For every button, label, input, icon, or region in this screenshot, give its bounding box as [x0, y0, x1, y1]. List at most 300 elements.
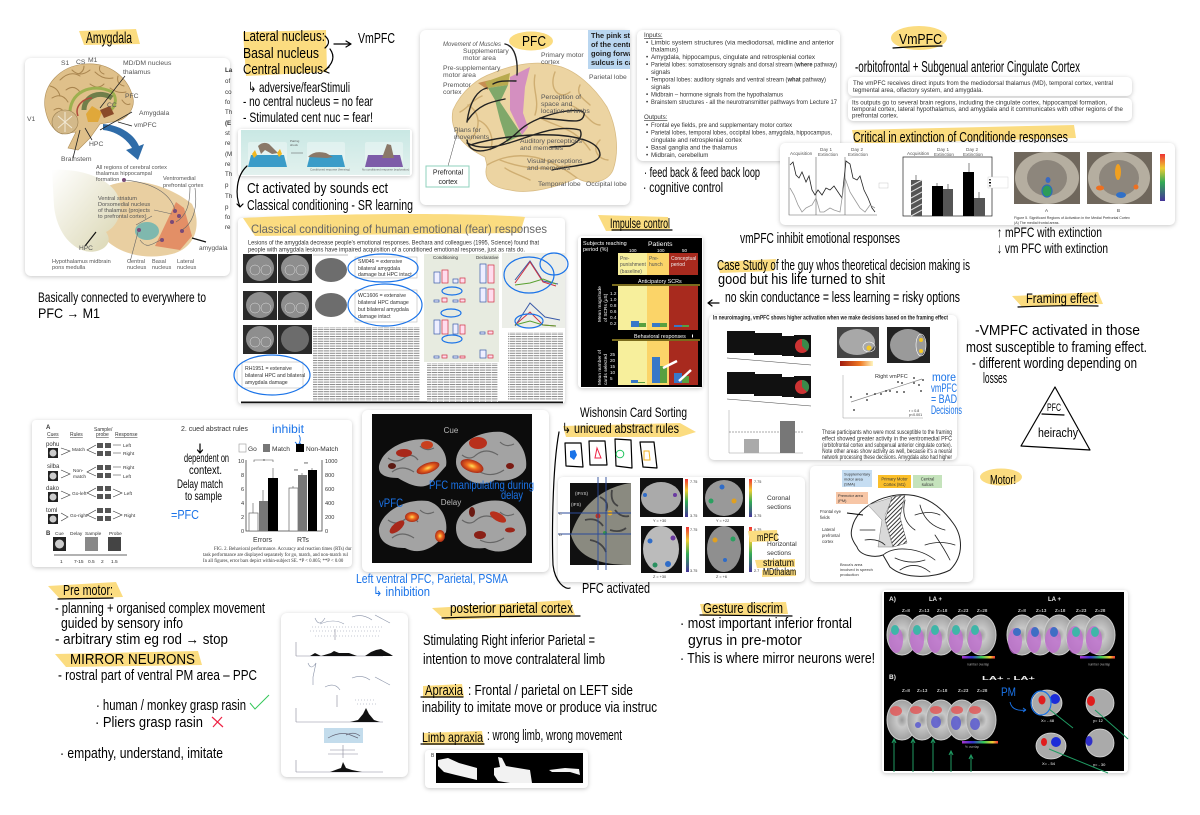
period header: Conceptual — [671, 256, 696, 262]
panel: inputs and outputs: signals — [651, 84, 670, 91]
card bars — [597, 341, 698, 385]
icon: cards — [565, 439, 657, 468]
panel: vmPFC inputs: tegmental area, olfactory system, and amygdala. — [853, 87, 983, 94]
note: premotor: - arbitrary stim eg rod → stop — [55, 631, 228, 648]
note: extinction directions: ↑ mPFC with extinction — [997, 224, 1102, 240]
blue note: inhibit: inhibit — [272, 422, 305, 436]
bar chart: Day 1 — [937, 147, 949, 152]
task schematic: pohu — [46, 442, 59, 448]
panel: inputs and outputs: • — [646, 76, 648, 84]
brain region labels: cortex — [541, 59, 560, 66]
panel: cue and delay brains: Cue — [444, 426, 459, 435]
panel: inputs and outputs: Frontal eye fields, pre and supplementary motor cortex — [651, 122, 793, 129]
section B labels — [889, 674, 1036, 693]
amygdala diagram labels: amygdala — [199, 245, 228, 252]
sagittal brain: (IFS) — [571, 502, 581, 507]
blue note box — [588, 30, 646, 69]
heading: PFC: PFC — [522, 33, 546, 50]
period header: Pre- — [620, 256, 630, 262]
WC1606 callout — [348, 284, 422, 326]
bar chart: errors and RTs: 1000 — [325, 459, 337, 465]
amygdala diagram labels: Dorsomedial nucleus — [98, 202, 150, 208]
icon: upper brain sagittal — [45, 64, 133, 150]
recording b — [308, 663, 390, 704]
brain region labels: motor area — [463, 55, 496, 62]
panel: inputs and outputs: • — [646, 152, 648, 159]
note: gesture discrimination: · most important inferior frontal — [680, 615, 852, 632]
text block: clipped letters: fo — [225, 214, 231, 221]
note: premotor: · human / monkey grasp rasin — [96, 697, 246, 714]
intro text: Lesions of the amygdala decrease people's emotional responses. Bechara and colleagues (1995, Science) found that — [248, 240, 539, 246]
task schematic: Response — [115, 432, 138, 438]
brain region labels: Pre-supplementary — [443, 65, 501, 72]
MRI A and B: A — [1045, 208, 1048, 213]
section A labels: Z=28 — [1095, 608, 1106, 613]
scatter plot — [843, 374, 924, 418]
note: limb apraxia — [421, 727, 623, 745]
SCR bars: 1.0 — [610, 297, 617, 302]
panel: amygdala anatomy — [25, 57, 230, 276]
bar chart: errors and RTs: 10 — [238, 459, 244, 465]
arrows: movement pathways — [467, 44, 600, 170]
note: feedback: · feed back & feed back loop — [644, 164, 760, 180]
heading: extinction — [852, 125, 1076, 146]
note: premotor: · Pliers grasp rasin — [95, 714, 203, 731]
text block: clipped letters: of — [225, 78, 230, 85]
text block: clipped letters: Th — [225, 193, 233, 200]
note: amygdala nuclei: VmPFC — [358, 30, 395, 47]
region boxes — [836, 470, 942, 504]
section B labels: Z=28 — [977, 688, 988, 693]
text block: clipped letters — [225, 67, 233, 231]
figure caption — [203, 547, 352, 564]
note: connected everywhere: Basically connected to everywhere to — [38, 289, 206, 305]
blue note: more vmPFC: Decisions — [931, 403, 962, 417]
bar chart: errors and RTs: Match — [272, 446, 290, 453]
note: classical conditioning: Ct activated by sounds ect — [247, 180, 389, 197]
bar chart: conditioning: Conditioning — [433, 255, 459, 260]
heading: impulse control — [598, 215, 672, 231]
task schematic: Match — [72, 447, 85, 453]
SCR bars: 0.2 — [610, 321, 617, 326]
note: Wisconsin card sorting: Wishonsin Card Sorting — [580, 404, 687, 420]
task schematic: Right — [123, 465, 135, 471]
panel: vmPFC inputs: The vmPFC receives direct inputs from the mediodorsal thalamus (MD), temporal cortex, ventral — [853, 80, 1113, 87]
panel: inputs and outputs: signals — [651, 69, 670, 76]
task schematic: Non- — [73, 468, 84, 474]
bar chart: conditioning — [424, 254, 499, 362]
blue labels: PFC manipulating during — [429, 478, 534, 492]
note: case study — [708, 257, 970, 306]
brain labels — [27, 57, 172, 163]
task schematic: B — [46, 531, 51, 537]
highlighted notes: mPFC — [757, 532, 779, 544]
MRI A and B: Figure 5. Significant Regions of Activation in the Medial Prefrontal Cortex — [1014, 216, 1130, 220]
title: Classical conditioning of human emotional (fear) responses — [251, 222, 547, 236]
blue note box: sulcus is called — [591, 58, 646, 67]
activation brains — [379, 432, 526, 552]
section B labels: LA+ - LA+ — [982, 676, 1036, 682]
brain labels: Brainstem — [61, 156, 92, 163]
brain region labels: motor area — [443, 72, 476, 79]
note: amygdala nuclei: ↳ adversive/fearStimuli — [248, 79, 350, 95]
note: amygdala nuclei: - Stimulated cent nuc = fear! — [243, 109, 373, 125]
region boxes: Primary Motor — [881, 476, 908, 482]
period header: Pre- — [649, 256, 659, 262]
bar chart: Acquisition — [907, 151, 930, 156]
amygdala diagram labels: Hypothalamus midbrain — [52, 259, 111, 265]
card bars: 20 — [610, 358, 616, 363]
section B brains — [887, 700, 998, 749]
SCR bars: Mean magnitude — [597, 286, 603, 322]
note: apraxia: : Frontal / parietal on LEFT side — [468, 682, 633, 699]
note: extinction directions — [997, 224, 1108, 256]
brain region labels: Occipital lobe — [586, 181, 627, 188]
period header: (baseline) — [620, 269, 642, 275]
note: gesture discrimination: · This is where mirror neurons were! — [680, 650, 875, 667]
text block: clipped letters: co — [225, 89, 232, 96]
section A labels: Z=23 — [958, 608, 969, 613]
bar chart: errors and RTs: 0 — [241, 529, 244, 535]
line chart — [789, 147, 888, 215]
text block: clipped letters: fo — [225, 99, 231, 106]
note: connected everywhere — [38, 289, 206, 321]
card bars: 25 — [610, 352, 616, 357]
activation scans — [837, 327, 930, 366]
sagittal brain: C — [559, 511, 562, 516]
task schematic: 0.5 — [88, 559, 95, 565]
coronal and horizontal scans: 7.75 — [754, 480, 761, 484]
note: apraxia: Apraxia — [425, 682, 463, 699]
bar chart: errors and RTs: 0 — [325, 529, 328, 535]
bar chart: errors and RTs: Non-Match — [306, 446, 339, 453]
coronal and horizontal scans: 2.7 — [754, 569, 759, 573]
panel: rat conditioning: Conditioned response (freezing) — [310, 168, 350, 172]
note: framing effect: most susceptible to framing effect. — [966, 339, 1147, 356]
skull sections — [1032, 689, 1114, 767]
icon: green check — [250, 695, 269, 709]
amygdala diagram labels: All regions of cerebral cortex — [96, 165, 167, 171]
note: apraxia — [421, 682, 657, 716]
bar chart: errors and RTs: ** — [294, 469, 298, 475]
heading: PFC — [509, 32, 553, 50]
task schematic: A — [46, 425, 51, 431]
section labels: sections — [767, 504, 792, 511]
blue note: left ventral PFC: Left ventral PFC, Parietal, PSMA — [356, 571, 508, 586]
panel: inputs and outputs: • — [646, 54, 648, 61]
section B labels: B) — [889, 674, 896, 681]
coronal and horizontal scans: Z = +6 — [716, 575, 727, 579]
amygdala diagram labels: Ventral striatum — [98, 196, 137, 202]
note: extinction directions: ↓ vm PFC with extinction — [997, 240, 1108, 256]
line chart: Extinction — [818, 152, 838, 157]
task schematic: probe — [96, 432, 109, 438]
side labels: prefrontal — [822, 533, 840, 538]
panel: framing effect imaging — [709, 315, 962, 461]
section A labels: LA + — [1048, 597, 1061, 603]
SCR bars: 0.8 — [610, 303, 617, 308]
blue note: =PFC: =PFC — [171, 507, 199, 522]
section A labels: Z=8 — [902, 608, 910, 613]
amygdala diagram labels: to prefrontal cortex) — [98, 214, 147, 220]
brain region labels: Perception of — [541, 94, 581, 101]
task screens — [727, 331, 811, 406]
bar chart: errors and RTs: 600 — [325, 487, 334, 493]
panel: inputs and outputs: Limbic system structures (via mediodorsal, midline and anterior — [651, 40, 834, 46]
panel: inputs and outputs: thalamus) — [651, 46, 678, 54]
brain labels: V1 — [27, 116, 36, 123]
panel: cued abstract rules — [32, 420, 352, 567]
section A labels — [889, 596, 1106, 613]
line chart: Extinction — [848, 152, 868, 157]
WC1606 callout: damage intact — [358, 314, 391, 320]
section labels: sections — [767, 550, 792, 557]
section B labels: Z=23 — [958, 688, 969, 693]
task schematic: Cues — [47, 432, 59, 438]
side labels: cortex — [822, 539, 834, 544]
bar chart: Day 2 — [966, 147, 978, 152]
bar chart: errors and RTs: 400 — [325, 501, 334, 507]
diagram: PFC hierarchy triangle — [1021, 387, 1090, 450]
bar chart: errors and RTs: Go — [248, 446, 257, 453]
note: amygdala nuclei: Basal nucleus — [243, 45, 319, 62]
panel: rat conditioning: shock — [290, 143, 298, 147]
task schematic: Go-left — [72, 491, 87, 497]
panel: inputs and outputs — [637, 30, 840, 161]
period header: hunch — [649, 262, 663, 268]
brain labels: PFC — [125, 93, 139, 100]
blue note: more vmPFC: = BAD — [931, 392, 957, 406]
task schematic: Right — [123, 451, 135, 457]
note: limb apraxia: Limb apraxia — [422, 729, 483, 745]
section A labels: Z=28 — [977, 608, 988, 613]
task schematic: Delay — [70, 531, 83, 537]
note: dependent on context: Delay match — [177, 477, 223, 491]
RH1951 callout: amygdala damage — [245, 380, 288, 386]
prefrontal cortex box: Prefrontal — [433, 170, 464, 176]
diagram: PFC hierarchy triangle: heirachy — [1038, 425, 1078, 440]
panel: inputs and outputs: Midbrain – hormone signals from the hypothalamus — [651, 92, 783, 98]
note: premotor: · empathy, understand, imitate — [60, 745, 223, 762]
brain region labels: Visual perceptions — [527, 158, 583, 165]
note: vmPFC inhibits: vmPFC inhibit emotional responses — [740, 230, 900, 247]
task schematic: Sample — [85, 531, 102, 537]
blue labels: delay — [501, 488, 523, 502]
brain region labels: Supplementary — [463, 48, 509, 55]
SCR bars: 0.6 — [610, 309, 617, 314]
brain region labels: and memories — [520, 145, 564, 152]
SCR bars: 1.2 — [610, 291, 617, 296]
section A labels: A) — [889, 596, 896, 603]
MRI A and B: B — [1117, 208, 1120, 213]
blue note box: going forward — [591, 49, 641, 58]
panel: vmPFC outputs: Its outputs go to several brain regions, including the cingulate cortex, hippocampal formation, — [852, 100, 1107, 106]
blue PM annotation — [1001, 685, 1051, 715]
brain region labels: Movement of Muscles — [443, 41, 502, 48]
card bars: 10 — [610, 370, 616, 375]
prefrontal cortex box: cortex — [438, 179, 458, 186]
skull sections: y= - 30 — [1093, 762, 1106, 767]
bar chart: Extinction — [963, 152, 983, 157]
brain scans — [243, 254, 348, 354]
line chart: Acquisition — [790, 151, 813, 156]
period header — [618, 253, 698, 275]
panel: inputs and outputs: • — [646, 144, 648, 152]
amygdala diagram labels: thalamus hippocampal — [96, 171, 152, 177]
bar chart: errors and RTs: ** — [304, 462, 308, 468]
bar chart: conditioning: Declarative — [476, 255, 499, 260]
note: dependent on context — [177, 444, 229, 503]
scatter plot: p<0.001 — [909, 413, 922, 417]
scatter plot: r = 0.8 — [909, 409, 919, 413]
section A brains: number overlap — [1088, 662, 1110, 666]
blue PM annotation: PM — [1001, 685, 1016, 699]
note: amygdala nuclei: - no central nucleus = no fear — [243, 93, 373, 109]
coronal and horizontal scans: Y = +30 — [653, 519, 666, 523]
amygdala diagram labels: nucleus — [152, 265, 171, 271]
bar chart: errors and RTs: * — [263, 459, 265, 465]
MRI A and B: (A) The medial frontal areas. — [1014, 221, 1059, 225]
blue note: inhibit — [272, 422, 305, 445]
region boxes: Central — [921, 476, 934, 482]
task schematic: Rules — [70, 432, 83, 438]
region boxes: motor area — [844, 476, 864, 482]
task schematic: match — [73, 474, 86, 480]
side labels: Broca's area — [840, 562, 863, 567]
text block: clipped letters: La — [225, 67, 233, 74]
task schematic — [46, 425, 138, 565]
panel: inputs and outputs: Outputs: — [644, 114, 668, 121]
heading: Amygdala: Amygdala — [86, 30, 132, 47]
region boxes: (PM) — [838, 498, 847, 503]
RH1951 callout: RH1951 = extensive — [245, 366, 292, 372]
period header: period — [671, 262, 685, 268]
brain region labels — [443, 41, 627, 188]
heading: vmPFC: VmPFC — [899, 31, 942, 48]
panel: inputs and outputs: • — [646, 99, 648, 106]
section A labels: Z=13 — [919, 608, 930, 613]
panel: vmPFC inputs — [848, 77, 1132, 96]
panel: patients chart: 100 — [629, 248, 637, 253]
panel: inputs and outputs: Parietal lobes, temporal lobes, occipital lobes, amygdala, hippocampus, — [651, 130, 832, 136]
panel: vmPFC outputs: prefrontal cortex. — [852, 112, 899, 120]
section labels — [767, 495, 797, 557]
panel: inputs and outputs: • — [646, 62, 648, 68]
panel: patients chart: period (%) — [583, 247, 609, 253]
note: framing effect: -VMPFC activated in those — [975, 322, 1140, 339]
note: premotor: MIRROR NEURONS — [70, 651, 195, 668]
bar chart: errors and RTs — [238, 444, 339, 544]
panel: framing effect imaging: In neuroimaging, vmPFC shows higher activation when we make decisions based on the framing effect — [713, 316, 948, 322]
amygdala diagram labels: nucleus — [127, 265, 146, 271]
recording a — [310, 615, 390, 636]
note: premotor: - rostral part of ventral PM area – PPC — [58, 667, 257, 684]
framing paragraph: Note other areas show activity as well, because it's a neural — [822, 448, 952, 455]
note: amygdala nuclei: Lateral nucleus: — [243, 28, 325, 45]
note: posterior parietal: intention to move contralateral limb — [423, 651, 605, 668]
framing paragraph — [822, 429, 952, 461]
amygdala diagram labels: prefrontal cortex — [163, 183, 204, 189]
brain region labels: space and — [541, 101, 573, 108]
bar chart — [903, 147, 1008, 216]
note: feedback: · cognitive control — [643, 179, 723, 195]
RH1951 callout: bilateral HPC and bilateral — [245, 373, 305, 379]
brain region labels: movements — [454, 134, 490, 141]
brain region labels: Temporal lobe — [538, 181, 581, 188]
bar chart: errors and RTs: 800 — [325, 473, 334, 479]
note: connected everywhere: PFC → M1 — [38, 305, 100, 321]
task schematic: Right — [124, 513, 136, 519]
text block: clipped letters: st — [225, 130, 230, 137]
panel: patients chart: Behavioral responses — [634, 334, 686, 340]
note: dependent on context: context. — [189, 463, 222, 477]
figure caption: In all figures, error bars depict within-subject SE. *P < 0.005; **P < 0.00 — [203, 559, 344, 564]
panel: mirror neuron recordings — [281, 613, 408, 777]
coronal and horizontal scans: 3.75 — [690, 514, 697, 518]
task schematic: 7-15 — [74, 559, 84, 565]
panel: patients chart: Anticipatory SCRs — [638, 279, 682, 285]
heading: impulse control: Impulse control — [610, 215, 670, 231]
panel: patients chart: 100 — [657, 248, 665, 253]
note: classical conditioning: Classical conditioning - SR learning — [247, 197, 413, 214]
region boxes: Cortex (M1) — [883, 482, 906, 487]
side labels: Frontal eye — [820, 509, 842, 514]
section A labels: Z=8 — [1018, 608, 1026, 613]
intro text — [248, 240, 539, 254]
brain labels: thalamus — [123, 69, 151, 76]
section A brains — [887, 615, 1115, 666]
panel: PFC brain — [420, 30, 646, 205]
figure caption: FIG. 2. Behavioral performance. Accuracy and reaction times (RTs) dur — [214, 547, 352, 552]
task schematic: Sample/ — [94, 427, 113, 433]
brain labels: CC — [107, 102, 117, 109]
hand silhouettes — [438, 758, 477, 780]
note: dependent on context: to sample — [185, 489, 222, 503]
line chart: Day 2 — [851, 147, 863, 152]
brain region labels: Auditory perceptions — [520, 138, 583, 145]
note: case study: Case Study of the guy whos theoretical decision making is — [717, 257, 970, 274]
task schematic: Go-right — [70, 513, 88, 519]
task schematic: Cue — [55, 531, 64, 537]
note: gesture discrimination: Gesture discrim — [703, 600, 783, 617]
sagittal brain: D — [559, 532, 562, 537]
recording c — [324, 728, 363, 743]
panel: inputs and outputs: Midbrain, cerebellum — [651, 152, 708, 159]
blue note: left ventral PFC: ↳ inhibition — [373, 584, 430, 599]
bar chart: frame manipulation — [729, 410, 803, 453]
framing paragraph: network processing these decisions. Amygdala also had higher — [822, 454, 952, 461]
task schematic: silba — [47, 464, 60, 470]
pointer lines — [73, 76, 132, 158]
note: posterior parietal: posterior parietal cortex — [450, 600, 573, 617]
region boxes: Supplementary — [844, 472, 870, 476]
skull sections: y= 12 — [1093, 718, 1104, 723]
panel: patients chart — [578, 236, 703, 388]
note: posterior parietal — [423, 600, 605, 668]
task schematic: Left — [123, 474, 132, 480]
WC1606 callout: but bilateral amygdala — [358, 307, 409, 313]
skull sections: X= - 54 — [1042, 761, 1056, 766]
text block: clipped letters: (E — [225, 120, 231, 127]
text block: clipped letters: p — [225, 182, 229, 189]
note: case study: no skin conductance = less learning = risky options — [725, 289, 960, 306]
panel: hand gestures — [425, 750, 588, 788]
task schematic: 2 — [101, 559, 104, 565]
panel: inputs and outputs: Amygdala, hippocampus, cingulate and retrosplenial cortex — [651, 54, 816, 61]
panel: inputs and outputs: Parietal lobes: somatosensory signals and dorsal stream (where pathway) — [651, 62, 837, 68]
panel: rat conditioning — [238, 129, 412, 176]
section B labels: Z=18 — [937, 688, 948, 693]
